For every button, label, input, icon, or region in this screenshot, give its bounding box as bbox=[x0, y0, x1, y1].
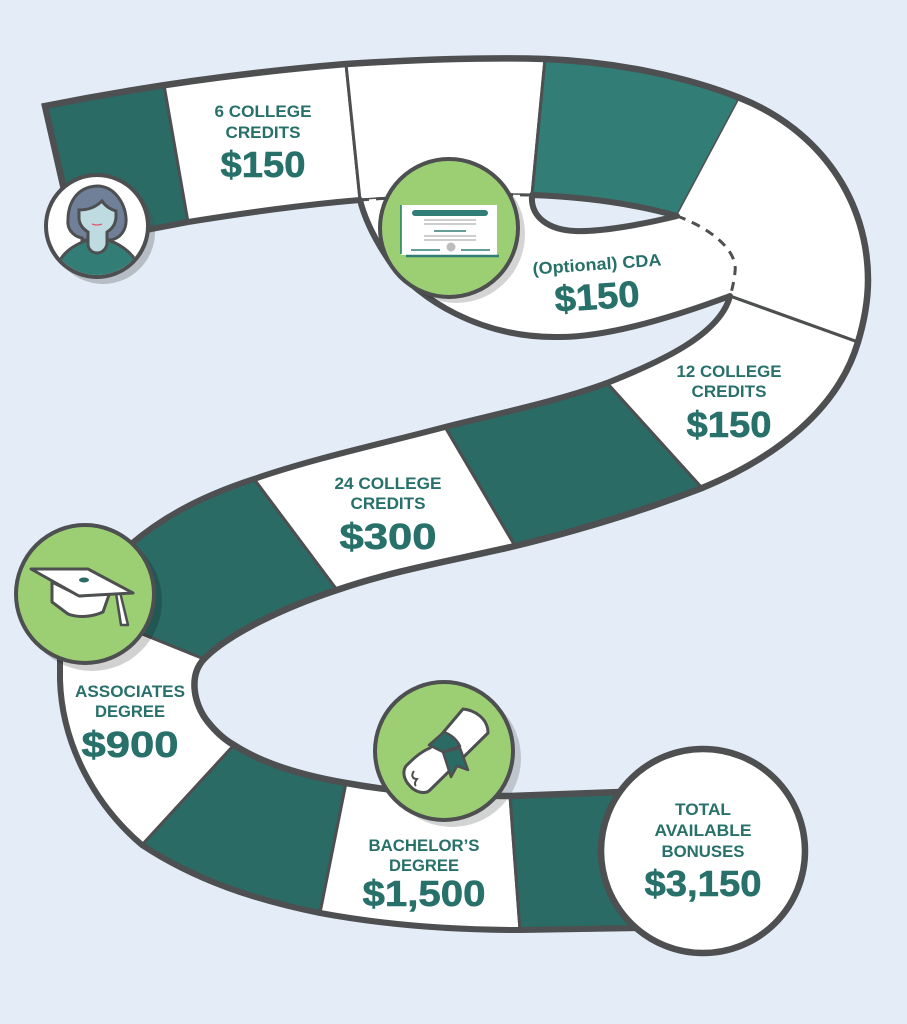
text: optional CDA: (Optional) CDA bbox=[532, 251, 662, 278]
divider: turn to 12 credits bbox=[730, 296, 858, 342]
icon: certificate circle bbox=[380, 159, 525, 303]
text: optional CDA: $150 bbox=[553, 273, 641, 320]
segment: dark 2 bbox=[445, 383, 702, 546]
segment: dark 4 bbox=[142, 745, 346, 913]
text: 12 college credits: 12 COLLEGE bbox=[676, 362, 782, 381]
road inner border bbox=[60, 200, 730, 930]
text: 12 college credits: CREDITS bbox=[692, 382, 766, 401]
segment: 24 college credits bbox=[254, 427, 515, 590]
segment: start bbox=[45, 85, 188, 240]
segment: associates degree bbox=[60, 625, 234, 845]
text: associates degree: $900 bbox=[82, 724, 178, 765]
text: optional CDA bbox=[532, 251, 662, 320]
text: 12 college credits: $150 bbox=[686, 404, 772, 445]
text: bachelors degree: BACHELOR’S bbox=[368, 836, 480, 855]
segment: dark 5 bbox=[510, 792, 640, 930]
icon: person avatar bbox=[46, 175, 155, 285]
segment: teal branch bbox=[532, 59, 740, 216]
text: associates degree: ASSOCIATES bbox=[75, 682, 185, 701]
segment: 12 college credits bbox=[607, 296, 858, 488]
segment: dark 3 bbox=[100, 479, 337, 659]
text: bachelors degree bbox=[362, 836, 486, 914]
text: 24 college credits: CREDITS bbox=[350, 494, 426, 513]
text: associates degree bbox=[75, 682, 185, 765]
road: game board path bbox=[45, 58, 868, 930]
text: 24 college credits: 24 COLLEGE bbox=[334, 474, 442, 493]
circle: total bonuses: AVAILABLE bbox=[654, 821, 752, 840]
circle: total bonuses: $3,150 bbox=[644, 863, 762, 904]
text: bachelors degree: DEGREE bbox=[389, 856, 459, 875]
icon: diploma circle bbox=[375, 682, 521, 827]
dashed lines: optional branch bbox=[360, 195, 735, 296]
text: 6 college credits bbox=[214, 102, 312, 185]
segment: blank white bbox=[346, 58, 545, 200]
segment: bachelors degree bbox=[320, 783, 520, 930]
text: bachelors degree: $1,500 bbox=[362, 873, 486, 914]
text: 12 college credits bbox=[676, 362, 782, 445]
text: 6 college credits: $150 bbox=[220, 144, 306, 185]
circle: total bonuses: TOTAL bbox=[675, 800, 731, 819]
text: 24 college credits bbox=[334, 474, 442, 557]
circle: total bonuses: BONUSES bbox=[662, 842, 744, 861]
segment: 6 college credits bbox=[164, 64, 360, 222]
text: associates degree: DEGREE bbox=[95, 702, 165, 721]
road outer border bbox=[45, 58, 868, 796]
circle: total bonuses bbox=[601, 749, 805, 953]
segment: optional CDA bbox=[360, 195, 735, 337]
text: 6 college credits: CREDITS bbox=[226, 123, 300, 142]
text: 24 college credits: $300 bbox=[340, 516, 436, 557]
segment: large white turn bbox=[677, 98, 868, 342]
icon: graduation cap circle bbox=[16, 525, 162, 671]
text: 6 college credits: 6 COLLEGE bbox=[214, 102, 312, 121]
hole in road bbox=[532, 195, 677, 231]
